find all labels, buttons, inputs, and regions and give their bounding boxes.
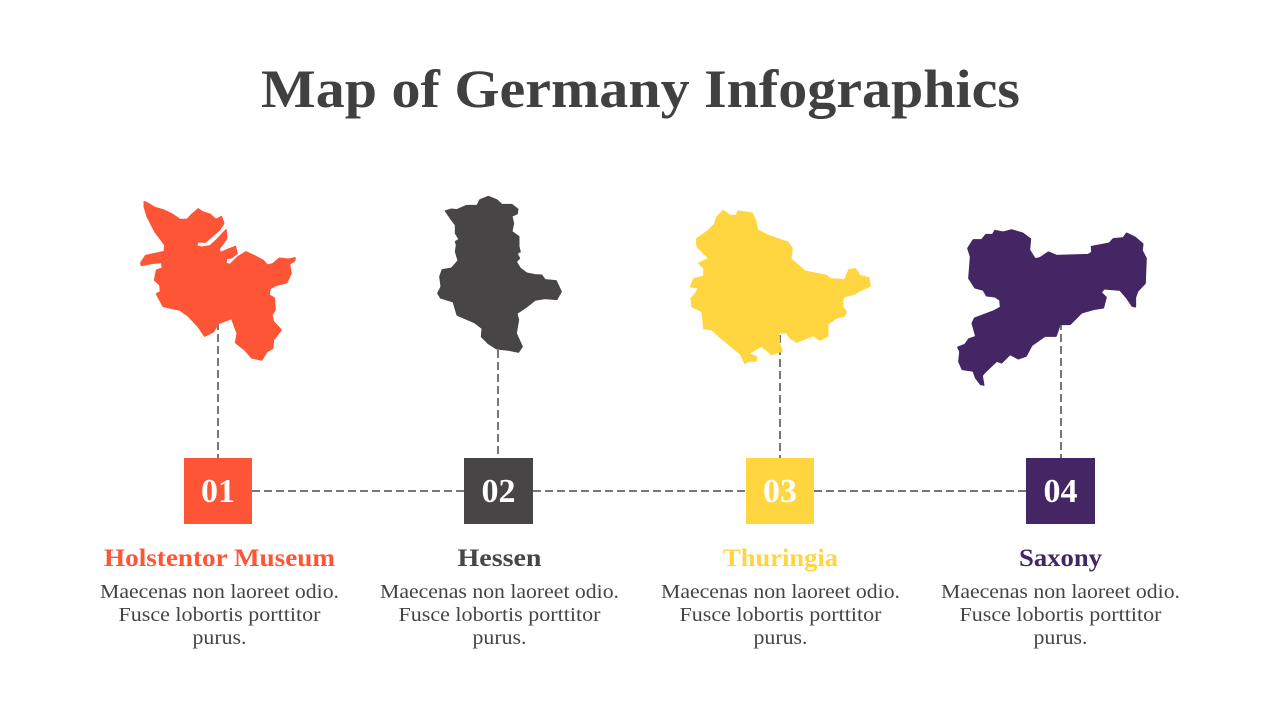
number box 02: 02 [482, 473, 516, 510]
text block: Thuringia: Maecenas non laoreet odio. [661, 581, 900, 603]
number box 04 [1026, 458, 1095, 524]
number box 04: 04 [1044, 473, 1078, 510]
text block: Thuringia: Fusce lobortis porttitor [680, 604, 882, 626]
text block: Hessen [380, 545, 619, 649]
text block: Hessen: Hessen [458, 545, 542, 572]
map: region 4 purple [958, 230, 1146, 385]
map: region 3 yellow [691, 211, 870, 363]
text block: Thuringia [661, 545, 900, 649]
text block: Thuringia: Thuringia [723, 545, 839, 572]
text block: Saxony: Maecenas non laoreet odio. [941, 581, 1180, 603]
number box 03: 03 [763, 473, 797, 510]
text block: Saxony: Saxony [1019, 545, 1103, 572]
number box 03 [746, 458, 814, 524]
text block: Thuringia: purus. [754, 627, 808, 649]
text block: Holstentor Museum: Maecenas non laoreet odio. [100, 581, 339, 603]
text block: Holstentor Museum [100, 545, 339, 649]
text block: Hessen: Fusce lobortis porttitor [398, 604, 601, 626]
text block: Saxony: Fusce lobortis porttitor [960, 604, 1162, 626]
text block: Holstentor Museum: Holstentor Museum [104, 545, 335, 572]
text block: Holstentor Museum: Fusce lobortis porttitor [118, 604, 321, 626]
map: region 1 red [141, 202, 295, 360]
title: Map of Germany Infographics [261, 59, 1020, 119]
text block: Hessen: Maecenas non laoreet odio. [380, 581, 619, 603]
number box 01: 01 [201, 473, 235, 510]
text block: Hessen: purus. [472, 627, 526, 649]
map: region 2 dark grey [438, 197, 561, 352]
number box 01 [184, 458, 252, 524]
text block: Saxony: purus. [1034, 627, 1088, 649]
number box 02 [464, 458, 533, 524]
text block: Holstentor Museum: purus. [192, 627, 246, 649]
text block: Saxony [941, 545, 1180, 649]
